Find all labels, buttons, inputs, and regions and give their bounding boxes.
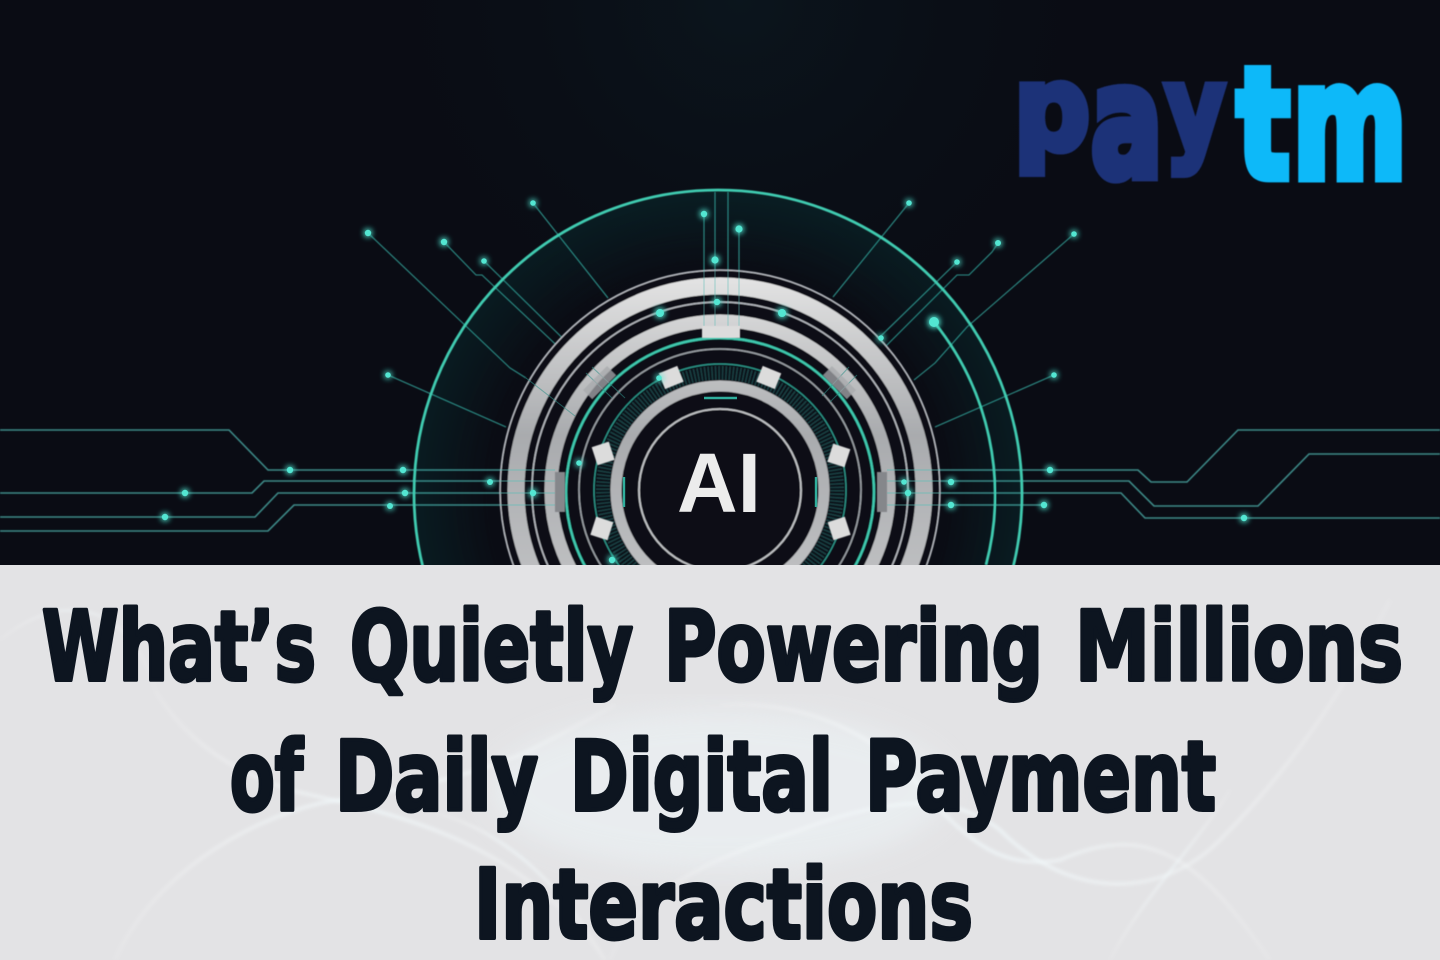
title line 3: Interactions [474,849,973,960]
title line 1: What’s [42,591,316,703]
title line 2: Payment [865,721,1216,833]
soft glow behind waves [490,710,950,870]
logo: Paytm: y [1165,42,1225,177]
title line 2: Digital [570,721,833,833]
glowing node dots [162,200,1247,563]
logo: Paytm: a [1091,34,1163,213]
second teal arc [934,322,995,565]
logo: Paytm: p [1014,43,1090,177]
logo: Paytm: m [1293,31,1407,215]
AI label: AI [677,436,761,530]
logo: Paytm: t [1237,37,1290,214]
panel: light title background [0,565,1440,960]
title line 2: of [230,721,304,833]
traces crossing over the rings [500,270,940,505]
circuit traces: left bus [0,430,560,531]
title [42,591,1403,960]
title line 1: Quietly [350,591,633,703]
concentric steel rings [500,270,940,710]
wave line pattern [0,600,1390,960]
circuit traces: radial connectors [368,192,1074,427]
title line 2: Daily [335,721,538,833]
title line 1 [42,591,1403,703]
outer teal ring [414,190,1022,798]
logo: Paytm [1014,31,1407,215]
teal inner dashes [624,398,816,507]
steel ring blocks [555,326,887,540]
circuit traces: right bus [880,430,1440,518]
title line 2 [230,721,1216,833]
title line 1: Powering [664,591,1043,703]
